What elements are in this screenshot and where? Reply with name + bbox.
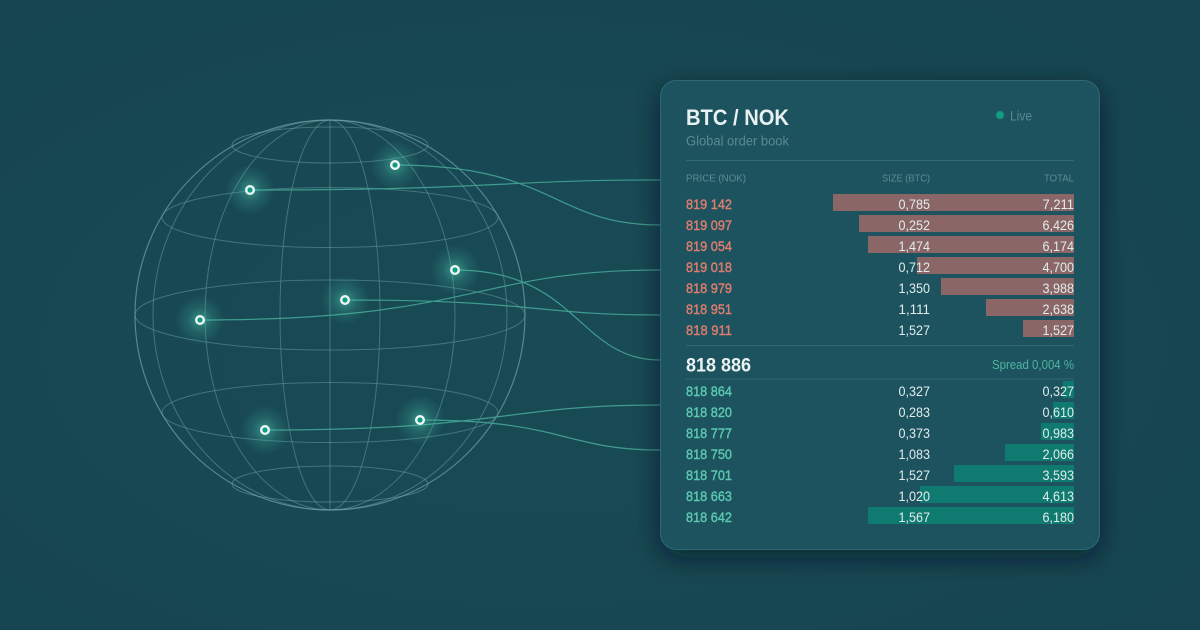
live indicator: Live xyxy=(1010,108,1032,124)
bids table: 818 701 xyxy=(686,467,732,483)
bids table: 0,327 xyxy=(1042,383,1074,399)
asks table: 1,111 xyxy=(898,301,930,317)
bids table: 0,327 xyxy=(898,383,930,399)
bids table: 0,283 xyxy=(898,404,930,420)
bids table: 1,527 xyxy=(898,467,930,483)
asks table: 1,527 xyxy=(1042,322,1074,338)
network nodes xyxy=(175,140,480,455)
asks table xyxy=(686,194,1074,338)
asks table: 0,252 xyxy=(898,217,930,233)
bids table: 0,373 xyxy=(898,425,930,441)
asks table: 1,350 xyxy=(898,280,930,296)
subtitle: Global order book xyxy=(686,134,789,148)
title: BTC / NOK xyxy=(686,105,789,130)
asks table: 819 054 xyxy=(686,238,732,254)
connector lines from nodes to order book xyxy=(200,165,660,450)
bids table: 818 820 xyxy=(686,404,732,420)
asks table: 0,712 xyxy=(898,259,930,275)
asks table: 6,174 xyxy=(1042,238,1074,254)
bids table: 1,083 xyxy=(898,446,930,462)
asks table: 819 142 xyxy=(686,196,732,212)
asks table: 3,988 xyxy=(1042,280,1074,296)
column headers: SIZE (BTC) xyxy=(882,172,930,184)
column headers: PRICE (NOK) xyxy=(686,172,746,184)
wireframe globe xyxy=(135,120,525,510)
asks table: 6,426 xyxy=(1042,217,1074,233)
column headers: TOTAL xyxy=(1044,172,1074,184)
bids table: 1,020 xyxy=(898,488,930,504)
bids table: 818 663 xyxy=(686,488,732,504)
asks table: 1,527 xyxy=(898,322,930,338)
bids table: 3,593 xyxy=(1042,467,1074,483)
panel: order book xyxy=(660,80,1100,550)
asks table: 4,700 xyxy=(1042,259,1074,275)
bids table: 1,567 xyxy=(898,509,930,525)
column headers xyxy=(686,172,1074,184)
asks table: 819 097 xyxy=(686,217,732,233)
bids table: 0,983 xyxy=(1042,425,1074,441)
bids table: 818 642 xyxy=(686,509,732,525)
bids table: 4,613 xyxy=(1042,488,1074,504)
bids table xyxy=(686,381,1074,525)
asks table: 2,638 xyxy=(1042,301,1074,317)
asks table: 818 911 xyxy=(686,322,732,338)
bids table: 818 864 xyxy=(686,383,732,399)
bids table: 2,066 xyxy=(1042,446,1074,462)
asks table: 0,785 xyxy=(898,196,930,212)
spread: Spread 0,004 % xyxy=(992,357,1074,372)
asks table: 819 018 xyxy=(686,259,732,275)
bids table: 0,610 xyxy=(1042,404,1074,420)
asks table: 7,211 xyxy=(1042,196,1074,212)
bids table: 6,180 xyxy=(1042,509,1074,525)
mid price: 818 886 xyxy=(686,354,751,376)
asks table: 1,474 xyxy=(898,238,930,254)
asks table: 818 979 xyxy=(686,280,732,296)
asks table: 818 951 xyxy=(686,301,732,317)
bids table: 818 750 xyxy=(686,446,732,462)
bids table: 818 777 xyxy=(686,425,732,441)
live indicator xyxy=(996,108,1032,124)
